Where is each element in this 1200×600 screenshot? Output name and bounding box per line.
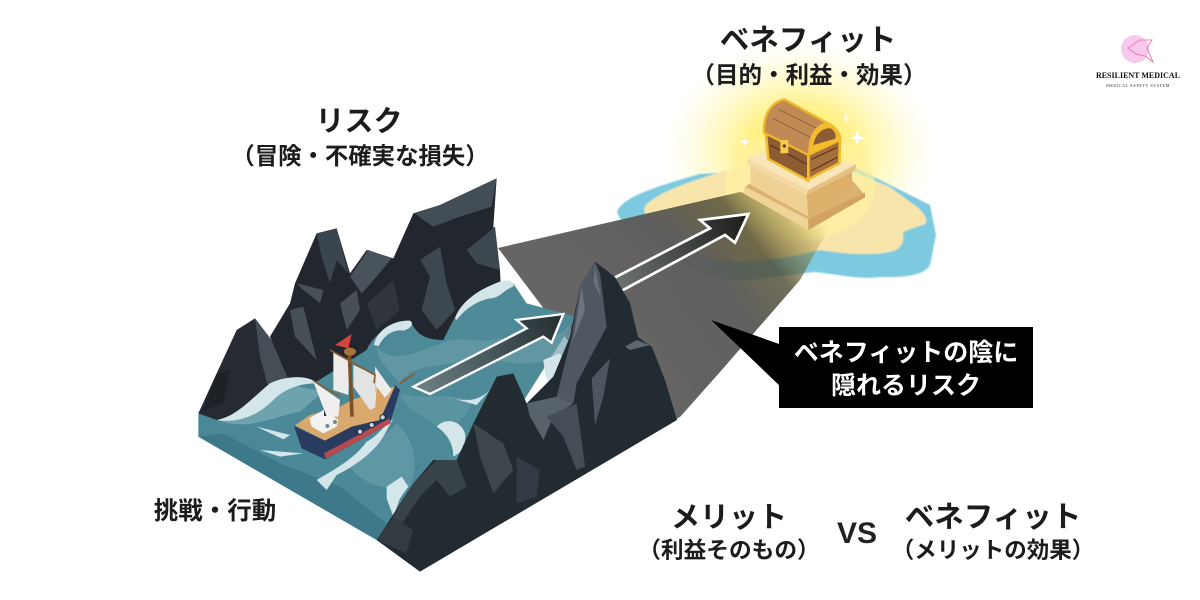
title: risk: [231, 106, 489, 169]
ship: [294, 334, 415, 459]
ship cabin: [309, 410, 338, 433]
logo name: RESILIENT MEDICAL: [1096, 71, 1180, 80]
benefit arrow: [613, 214, 748, 292]
island water ring: [617, 165, 936, 280]
callout pointer: [711, 320, 782, 388]
merit note: （利益そのもの）: [638, 537, 820, 563]
benefit subheading: （目的・利益・効果）: [692, 62, 926, 88]
callout: risk hidden behind benefit: 隠れるリスク: [831, 372, 981, 400]
title: benefit: [692, 24, 926, 88]
risk heading: リスク: [315, 106, 403, 138]
logo circle: [1121, 35, 1149, 63]
island: [617, 130, 936, 280]
ship sails: [333, 352, 350, 395]
benefit heading: ベネフィット: [720, 24, 896, 57]
benefit label: ベネフィット: [905, 501, 1081, 534]
glow over sand: [725, 130, 875, 240]
comparison: merit vs benefit: [638, 501, 1094, 563]
shadow cone of benefit: [498, 192, 838, 440]
ship flag: [335, 334, 352, 348]
callout text: ベネフィットの陰に: [794, 339, 1018, 367]
sea block: [198, 283, 577, 572]
pedestal: [743, 147, 865, 230]
logo tagline: MEDICAL SAFETY SYSTEM: [1106, 83, 1170, 88]
chest: [764, 99, 840, 181]
logo: [1096, 35, 1180, 88]
white outlined arrow: [413, 314, 563, 394]
back rocks: [198, 178, 502, 427]
island sand: [644, 165, 926, 261]
logo dove: [1128, 40, 1153, 62]
callout: risk hidden behind benefit: [711, 320, 1033, 408]
front rocks: [377, 262, 677, 572]
risk subheading: （冒険・不確実な損失）: [231, 143, 489, 169]
merit label: メリット: [671, 502, 787, 534]
waves and foam: [217, 280, 563, 517]
vs: VS: [837, 517, 877, 550]
ship mast: [349, 352, 352, 417]
callout box: [779, 327, 1033, 408]
label: challenge and action: 挑戦・行動: [154, 497, 276, 525]
golden glow around treasure: [660, 38, 940, 262]
ship hull: [294, 385, 400, 459]
isometric sea diorama: [198, 178, 677, 572]
benefit note: （メリットの効果）: [892, 538, 1094, 563]
sparkles: [740, 112, 865, 147]
treasure chest on pedestal: [740, 99, 865, 230]
ship deck: [295, 386, 395, 441]
